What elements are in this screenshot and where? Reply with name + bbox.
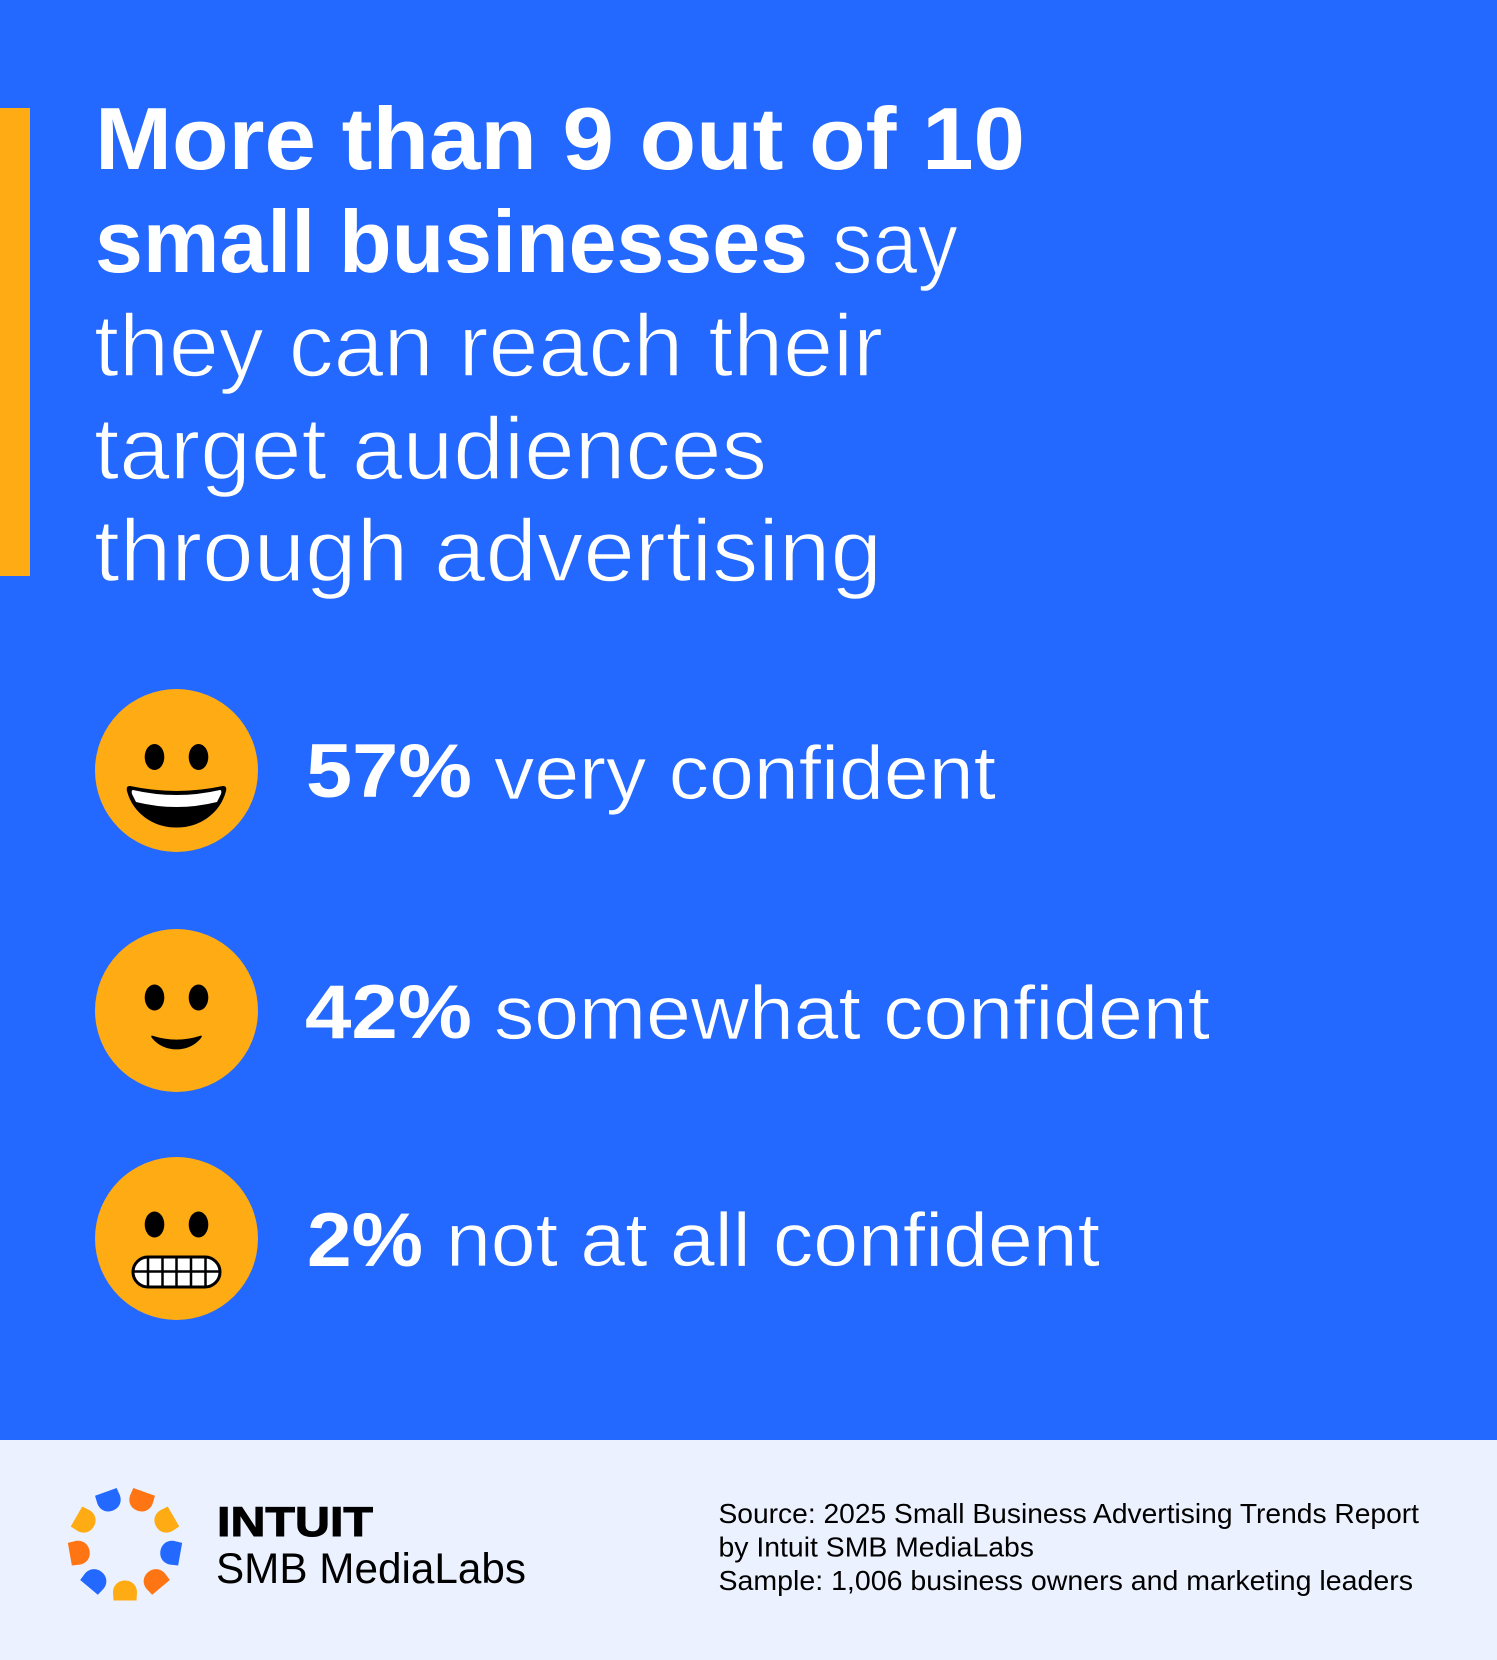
title: through advertising: [94, 501, 882, 600]
title: target audiences: [94, 399, 767, 498]
accent bar: [0, 108, 30, 576]
title: small businesses: [95, 192, 808, 291]
icon: petal ring: [68, 1488, 182, 1600]
source note: Source: 2025 Small Business Advertising Trends Report: [718, 1498, 1419, 1529]
title: say: [832, 193, 958, 292]
title: they can reach their: [94, 296, 883, 395]
icon: very confident big grin face: [95, 689, 258, 852]
title: [94, 89, 1025, 600]
stat: 2% not at all confident: not at all confident: [446, 1198, 1100, 1283]
source note: Sample: 1,006 business owners and marketing leaders: [718, 1565, 1413, 1596]
panel: footer background: [0, 1440, 1497, 1660]
logo: Intuit SMB MediaLabs: [68, 1488, 526, 1600]
stat: 2% not at all confident: 2%: [307, 1198, 423, 1283]
title: More than 9 out of 10: [95, 89, 1025, 188]
wordmark: SMB MediaLabs: SMB MediaLabs: [216, 1545, 526, 1593]
stat: 57% very confident: very confident: [494, 731, 996, 816]
source note: [718, 1498, 1419, 1596]
icon: not at all confident grimace face: [95, 1157, 258, 1320]
stat: 42% somewhat confident: 42%: [305, 970, 472, 1055]
source note: by Intuit SMB MediaLabs: [718, 1532, 1034, 1562]
stat: 42% somewhat confident: somewhat confident: [494, 971, 1210, 1056]
wordmark: INTUIT: INTUIT: [217, 1498, 373, 1545]
stat: 57% very confident: 57%: [306, 729, 472, 814]
icon: somewhat confident smile face: [95, 929, 258, 1092]
stat: 57% very confident: [306, 729, 996, 816]
